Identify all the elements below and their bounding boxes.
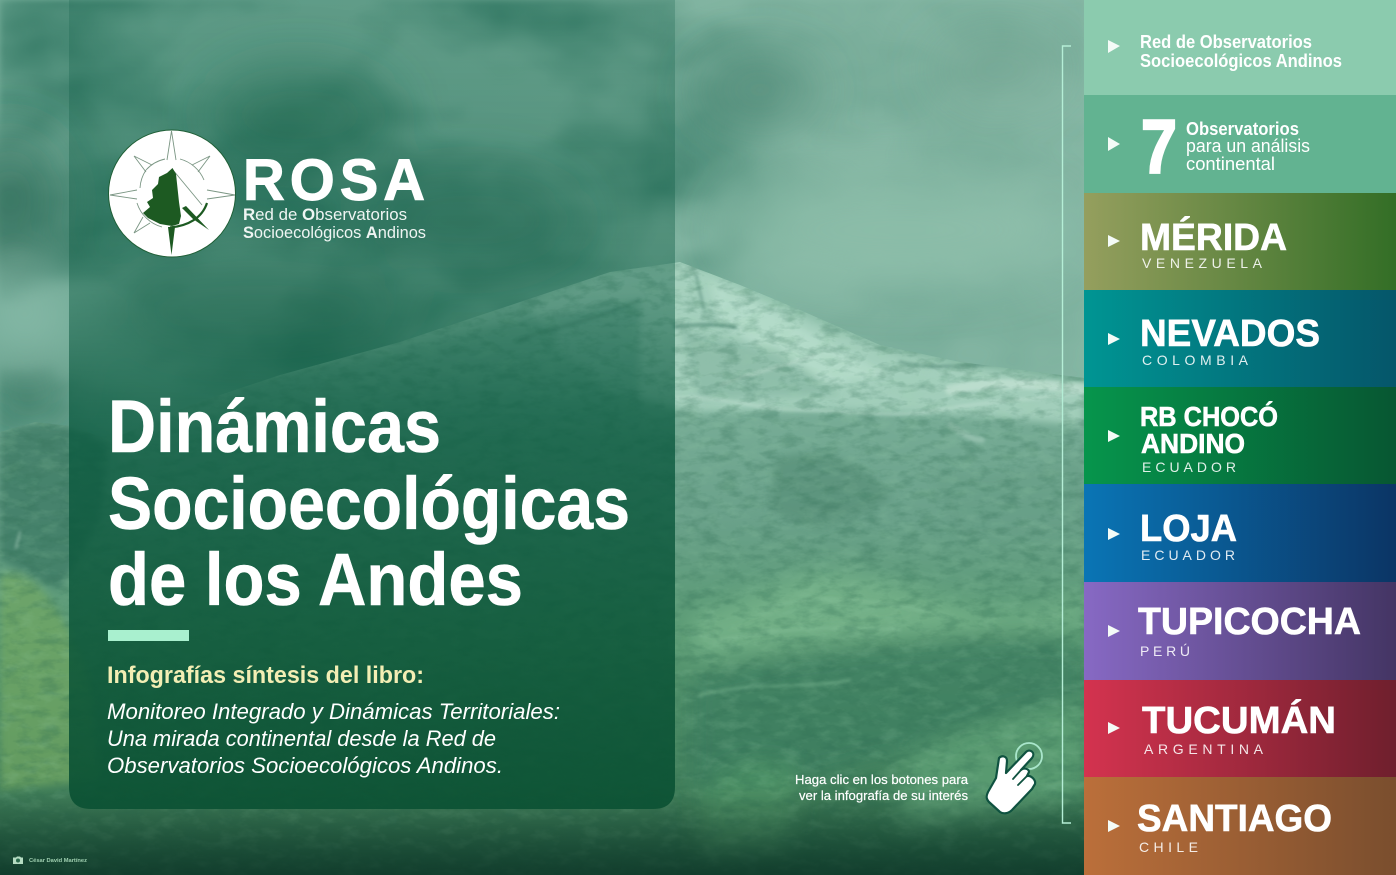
button: Red de Observatorios: Red de Observatorios [1140, 31, 1312, 52]
book title [107, 699, 560, 778]
title: Dinámicas [108, 385, 441, 468]
bracket line [1062, 46, 1071, 823]
button: 7 Observatorios: continental [1186, 153, 1275, 174]
button: Mérida: MÉRIDA [1140, 215, 1287, 259]
logo wordmark: ROSA [243, 148, 430, 213]
button: Red de Observatorios: Socioecológicos Andinos [1140, 50, 1342, 71]
title: de los Andes [108, 538, 523, 621]
background photo: clouds and snowy volcano [0, 0, 1084, 875]
icon: compass and mountain emblem [108, 130, 236, 257]
panel: title card [69, 0, 675, 809]
button: RB Chocó Andino: ANDINO [1141, 428, 1245, 459]
button: 7 Observatorios [1084, 95, 1396, 193]
button: Tucumán: TUCUMÁN [1142, 698, 1336, 742]
button: 7 Observatorios: Observatorios [1186, 118, 1299, 139]
logo tagline: Socioecológicos Andinos [243, 224, 426, 242]
button: Santiago: SANTIAGO [1137, 798, 1332, 840]
button: Loja: ECUADOR [1141, 547, 1235, 563]
button: Loja: LOJA [1140, 508, 1237, 550]
book title: Observatorios Socioecológicos Andinos. [107, 753, 503, 778]
button: Nevados [1084, 290, 1396, 387]
button: RB Chocó Andino [1084, 387, 1396, 484]
title: Socioecológicas [108, 462, 630, 545]
button: RB Chocó Andino: ECUADOR [1142, 459, 1236, 475]
button: Tupicocha [1084, 582, 1396, 680]
icon: camera [13, 856, 23, 864]
subtitle: Infografías síntesis del libro: [107, 662, 424, 689]
photo credit: César David Martínez [29, 858, 87, 864]
logo tagline [243, 206, 426, 242]
button: 7 Observatorios: para un análisis [1186, 135, 1310, 156]
click instruction [795, 773, 968, 803]
button: Mérida [1084, 193, 1396, 290]
button: Santiago [1084, 777, 1396, 875]
title [108, 385, 630, 621]
click instruction: ver la infografía de su interés [799, 789, 968, 803]
book title: Monitoreo Integrado y Dinámicas Territoriales: [107, 699, 560, 724]
click instruction: Haga clic en los botones para [795, 773, 968, 787]
button: Red de Observatorios [1084, 0, 1396, 95]
icon: pointing hand [987, 743, 1042, 813]
button: 7 Observatorios: 7 [1141, 105, 1177, 190]
button: Santiago: CHILE [1139, 839, 1198, 855]
button: Tucumán: ARGENTINA [1144, 741, 1264, 757]
logo tagline: Red de Observatorios [243, 206, 407, 224]
button: Mérida: VENEZUELA [1142, 255, 1263, 271]
button: Tucumán [1084, 680, 1396, 777]
button: RB Chocó Andino: RB CHOCÓ [1140, 401, 1278, 432]
button: Tupicocha: PERÚ [1140, 643, 1190, 659]
button: Loja [1084, 484, 1396, 582]
button: Tupicocha: TUPICOCHA [1138, 601, 1361, 643]
button: Nevados: COLOMBIA [1142, 352, 1249, 368]
book title: Una mirada continental desde la Red de [107, 726, 496, 751]
logo: ROSA [108, 130, 430, 257]
button: Nevados: NEVADOS [1140, 313, 1320, 355]
title accent bar [108, 630, 189, 641]
photo credit [13, 856, 87, 864]
